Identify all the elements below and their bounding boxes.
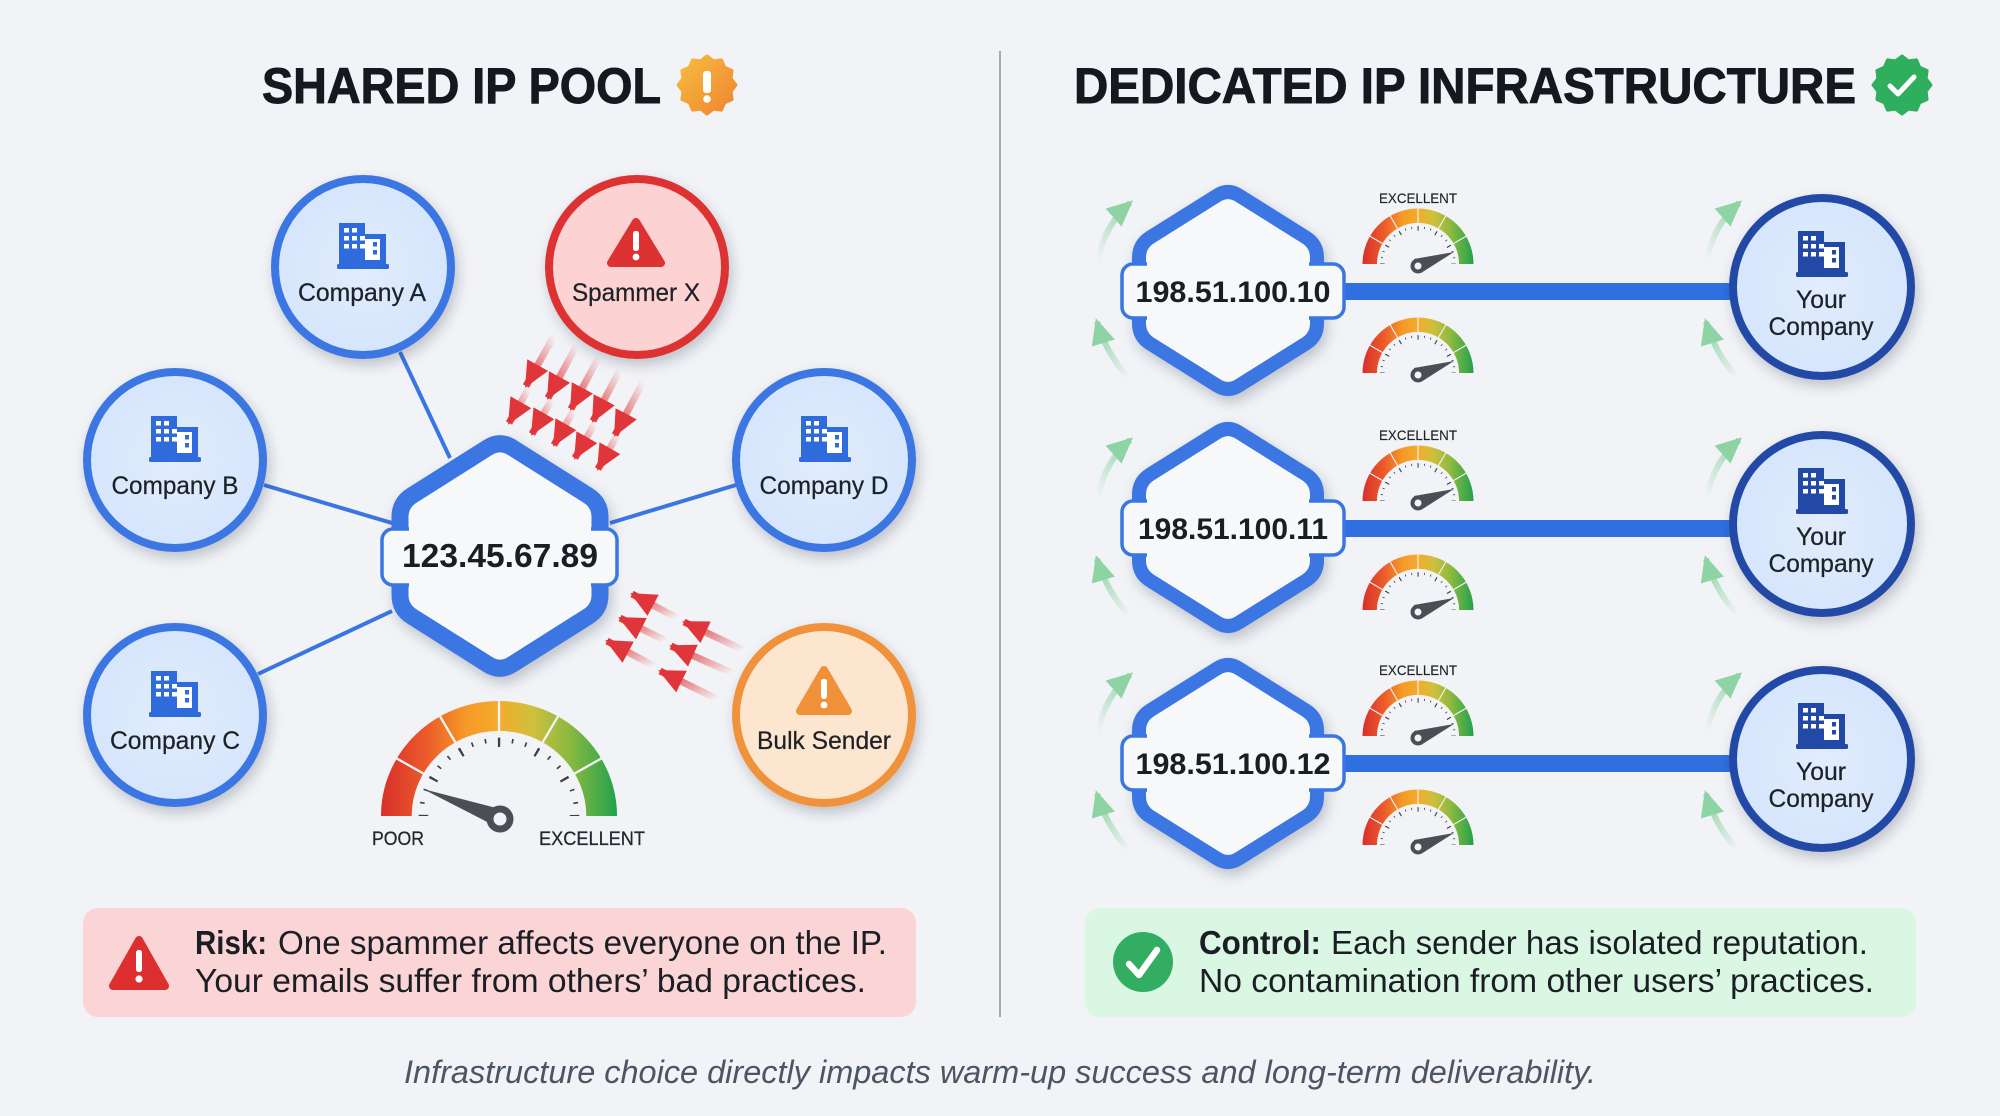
- arrows: traffic from Bulk Sender: [607, 594, 743, 699]
- row: dedicated IP 198.51.100.11: [1097, 427, 1911, 626]
- footer caption: Infrastructure choice directly impacts warm-up success and long-term deliverability.: [404, 1054, 1596, 1090]
- icon: orange warning badge: [678, 56, 736, 114]
- icon: check circle: [1113, 932, 1173, 992]
- node: Company A: Company A: [298, 279, 426, 307]
- growth arrows: [1097, 675, 1739, 850]
- row: dedicated IP 198.51.100.10: [1097, 190, 1911, 389]
- icon: risk warning triangle: [113, 940, 165, 986]
- hexagon: shared IP: 123.45.67.89: [402, 537, 598, 574]
- node: Company D: [736, 372, 912, 548]
- growth arrows: [1097, 203, 1739, 378]
- node: Company B: [87, 372, 263, 548]
- connector lines: [258, 352, 736, 674]
- callout: control: Each sender has isolated reputation.: [1331, 924, 1868, 961]
- hexagon: shared IP: [382, 444, 617, 668]
- row: dedicated IP 198.51.100.12: Company: [1768, 785, 1874, 813]
- node: Bulk Sender: [736, 627, 912, 803]
- node: Bulk Sender: Bulk Sender: [757, 727, 891, 755]
- row: dedicated IP 198.51.100.12: EXCELLENT: [1379, 662, 1457, 678]
- title: dedicated IP infrastructure: DEDICATED IP INFRASTRUCTURE: [1074, 58, 1856, 114]
- node: Company B: Company B: [112, 472, 238, 500]
- node: Spammer X: Spammer X: [572, 279, 700, 307]
- title: shared IP pool: SHARED IP POOL: [262, 58, 661, 114]
- row: dedicated IP 198.51.100.11: EXCELLENT: [1379, 427, 1457, 443]
- gauge: shared reputation poor: EXCELLENT: [539, 829, 645, 850]
- row: dedicated IP 198.51.100.12: [1097, 662, 1911, 862]
- row: dedicated IP 198.51.100.10: Your: [1796, 286, 1846, 314]
- row: dedicated IP 198.51.100.10: EXCELLENT: [1379, 190, 1457, 206]
- arrows: spam from Spammer X: [509, 336, 643, 469]
- node: Spammer X: [549, 179, 725, 355]
- callout: risk: [83, 908, 916, 1017]
- row: dedicated IP 198.51.100.11: 198.51.100.11: [1138, 513, 1328, 546]
- row: dedicated IP 198.51.100.10: Company: [1768, 313, 1874, 341]
- callout: risk: One spammer affects everyone on the IP.: [278, 924, 887, 961]
- callout: risk: Risk:: [195, 924, 267, 961]
- row: dedicated IP 198.51.100.11: Company: [1768, 550, 1874, 578]
- panel: shared IP pool diagram: [87, 179, 912, 850]
- growth arrows: [1097, 440, 1739, 615]
- row: dedicated IP 198.51.100.11: Your: [1796, 523, 1846, 551]
- callout: control: No contamination from other users’ practices.: [1199, 962, 1874, 999]
- node: Company A: [275, 179, 451, 355]
- callout: risk: Your emails suffer from others’ bad practices.: [195, 962, 866, 999]
- row: dedicated IP 198.51.100.12: 198.51.100.12: [1136, 748, 1330, 781]
- callout: control: Control:: [1199, 924, 1321, 961]
- node: Company D: Company D: [760, 472, 888, 500]
- callout: control: [1085, 908, 1916, 1017]
- gauge: shared reputation poor: [372, 700, 645, 850]
- node: Company C: Company C: [110, 727, 240, 755]
- row: dedicated IP 198.51.100.12: Your: [1796, 758, 1846, 786]
- gauge: shared reputation poor: POOR: [372, 829, 424, 850]
- node: Company C: [87, 627, 263, 803]
- row: dedicated IP 198.51.100.10: 198.51.100.10: [1136, 276, 1330, 309]
- icon: green check badge: [1873, 56, 1931, 114]
